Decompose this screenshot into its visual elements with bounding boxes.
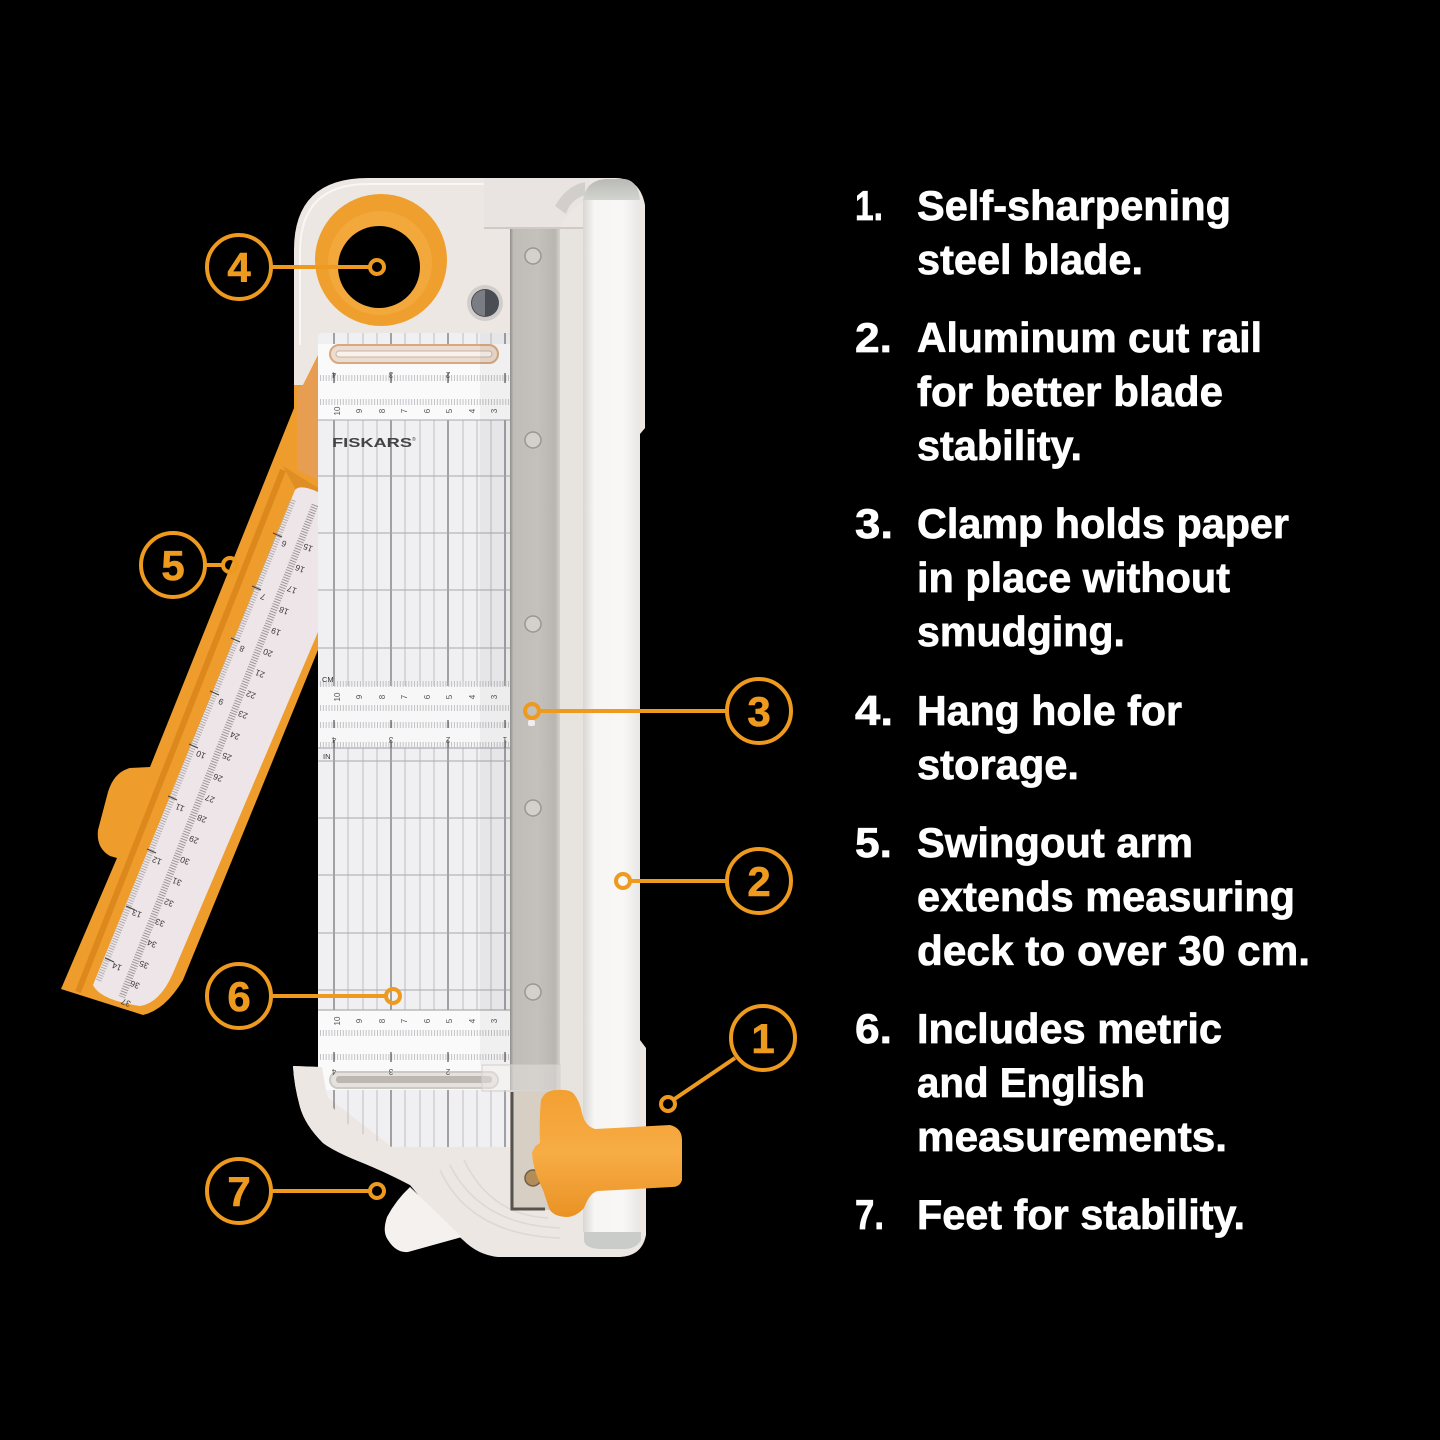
logo: FISKARS	[332, 436, 412, 450]
logo: ®	[412, 436, 416, 443]
cm numbers middle: 9	[355, 694, 364, 699]
cm numbers middle: 10	[333, 692, 342, 701]
arm cm labels: 33	[153, 916, 166, 929]
item 4: Hang hole for	[917, 687, 1182, 734]
top clamp bracket	[484, 178, 590, 228]
trimmer base	[293, 178, 646, 1257]
arm inch labels: 8	[238, 643, 246, 654]
cm numbers middle: 5	[445, 694, 454, 699]
arm cm labels: 37	[119, 996, 132, 1009]
cm numbers bottom: 7	[400, 1018, 409, 1023]
item 1	[855, 182, 1231, 283]
grid horizontal lines	[318, 420, 510, 990]
arm tick marks	[98, 500, 293, 982]
cm numbers top: 7	[400, 408, 409, 413]
clamp nub	[528, 720, 535, 726]
major ruler ticks	[334, 373, 505, 1062]
arm top shading	[283, 466, 318, 520]
arm ridge channel	[78, 470, 283, 992]
feature list	[855, 182, 1310, 1238]
cm numbers middle: 6	[423, 694, 432, 699]
callout 7: feet: 7	[227, 1168, 251, 1215]
arm body	[61, 345, 318, 1015]
cm numbers middle: 7	[400, 694, 409, 699]
cm numbers bottom: 4	[468, 1018, 477, 1023]
rail cap bottom	[584, 1232, 641, 1249]
hang hole	[338, 226, 420, 308]
item 5: extends measuring	[917, 873, 1295, 920]
cm numbers bottom: 6	[423, 1018, 432, 1023]
translucent clamp overlap on deck	[480, 333, 510, 1065]
screws	[525, 248, 541, 1000]
inch numbers bottom: 2	[445, 1067, 450, 1076]
inch numbers top: 3	[388, 370, 393, 379]
item 3: 3.	[855, 500, 893, 547]
clamp knob	[467, 285, 503, 321]
arm cm labels: 30	[178, 854, 191, 867]
cm numbers bottom: 8	[378, 1018, 387, 1023]
item 6: measurements.	[917, 1113, 1227, 1160]
cm numbers middle: 3	[490, 694, 499, 699]
orange hang ring	[315, 194, 447, 326]
arm cm labels: 21	[253, 667, 266, 680]
inch numbers middle: 3	[388, 735, 393, 744]
item 2: Aluminum cut rail	[917, 314, 1262, 361]
arm cm labels: 36	[128, 978, 141, 991]
top ruler band	[318, 344, 510, 420]
grid minor vertical lines	[348, 333, 491, 1147]
arm cm labels: 31	[170, 875, 183, 888]
callout 6: measurements: 6	[227, 973, 251, 1020]
item 3: smudging.	[917, 608, 1125, 655]
cm numbers middle	[333, 692, 499, 701]
grid major vertical lines	[334, 333, 505, 1147]
inch numbers top: 2	[445, 370, 450, 379]
arm inch labels: 10	[194, 748, 207, 761]
item 3: Clamp holds paper	[917, 500, 1289, 547]
arm inch labels: 14	[110, 960, 123, 973]
item 3: in place without	[917, 554, 1230, 601]
arm cm labels: 18	[277, 604, 290, 617]
arm cm labels: 15	[301, 541, 314, 554]
logo	[332, 436, 416, 450]
item 1: Self-sharpening	[917, 182, 1231, 229]
callout 3: clamp	[525, 679, 791, 743]
cm numbers bottom: 9	[355, 1018, 364, 1023]
arm major inch ticks	[105, 533, 282, 962]
arm inch labels: 7	[259, 591, 267, 602]
cm numbers middle: 8	[378, 694, 387, 699]
arm cm labels: 17	[285, 583, 298, 596]
cm numbers top: 6	[423, 408, 432, 413]
arm cm labels: 16	[293, 562, 306, 575]
light channel	[560, 228, 584, 1210]
peach translucent strip over arm	[297, 357, 318, 480]
IN label: IN	[323, 752, 330, 761]
callout 4: hang hole	[207, 235, 384, 299]
arm cm labels	[119, 541, 314, 1009]
callout 6: measurements	[207, 964, 400, 1028]
callout 1: blade: 1	[751, 1015, 775, 1062]
cm numbers top	[333, 406, 499, 415]
cm numbers top: 9	[355, 408, 364, 413]
arm inch labels: 9	[217, 696, 225, 707]
arm inch labels: 11	[174, 801, 186, 814]
top base highlight edge	[300, 184, 590, 345]
inch numbers bottom	[331, 1067, 450, 1076]
cm numbers bottom: 10	[333, 1016, 342, 1025]
blade handle	[532, 1090, 682, 1217]
item 1: 1.	[855, 182, 883, 229]
inch numbers middle: 2	[445, 735, 450, 744]
arm ruler face	[93, 487, 318, 1006]
item 3	[855, 500, 1289, 655]
inch numbers bottom: 3	[388, 1067, 393, 1076]
callout 3: clamp: 3	[747, 688, 771, 735]
item 7: 7.	[855, 1191, 884, 1238]
arm inch labels: 12	[150, 854, 163, 867]
bottom slot	[330, 1072, 498, 1088]
item 1: steel blade.	[917, 236, 1143, 283]
CM label: CM	[322, 675, 334, 684]
item 7: Feet for stability.	[917, 1191, 1245, 1238]
item 6: 6.	[855, 1005, 892, 1052]
callout 4: hang hole: 4	[227, 244, 251, 291]
arm inch labels	[110, 538, 288, 973]
cm numbers top: 3	[490, 408, 499, 413]
callout 5: swingout arm: 5	[161, 542, 185, 589]
deck surface	[318, 333, 510, 1147]
rail cap top	[583, 179, 640, 200]
item 5: Swingout arm	[917, 819, 1193, 866]
product illustration: paper trimmer	[61, 178, 682, 1257]
aluminum cut rail	[583, 179, 641, 1249]
cm numbers middle: 4	[468, 694, 477, 699]
inch numbers middle	[331, 735, 507, 744]
arm cm labels: 20	[261, 646, 274, 659]
clamp lower bracket	[482, 1065, 560, 1091]
arm cm labels: 22	[244, 688, 257, 701]
cm numbers bottom: 5	[445, 1018, 454, 1023]
arm cm labels: 32	[162, 896, 175, 909]
item 2: stability.	[917, 422, 1082, 469]
cm numbers top: 8	[378, 408, 387, 413]
item 5	[855, 819, 1310, 974]
blade plate outline	[512, 1092, 545, 1209]
item 6	[855, 1005, 1227, 1160]
item 6: and English	[917, 1059, 1145, 1106]
arm cm labels: 26	[211, 771, 224, 784]
arm cm labels: 28	[195, 812, 208, 825]
inch numbers top: 4	[331, 370, 336, 379]
inch numbers middle: 1	[502, 735, 507, 744]
inch numbers top	[331, 370, 450, 379]
cm numbers bottom: 3	[490, 1018, 499, 1023]
swingout arm	[61, 345, 318, 1015]
ruler ticks	[320, 378, 509, 1057]
top slot	[330, 345, 498, 363]
callout 2: rail: 2	[747, 858, 771, 905]
item 6: Includes metric	[917, 1005, 1222, 1052]
inch numbers middle: 4	[331, 735, 336, 744]
ring inner bevel	[328, 211, 432, 315]
item 4	[855, 687, 1182, 788]
arm cm labels: 34	[145, 937, 158, 950]
blade channel	[510, 1090, 560, 1210]
item 5: deck to over 30 cm.	[917, 927, 1310, 974]
callout 5: swingout arm	[141, 533, 237, 597]
blade screw	[525, 1170, 541, 1186]
arm inch labels: 13	[130, 907, 143, 920]
arm cm labels: 23	[236, 708, 249, 721]
callout 1: blade	[661, 1006, 795, 1111]
foot	[385, 1187, 462, 1252]
item 2: for better blade	[917, 368, 1223, 415]
arm inch labels: 6	[280, 538, 288, 549]
callout 7: feet	[207, 1159, 384, 1223]
item 2: 2.	[855, 314, 892, 361]
base bottom sweep lines	[440, 1160, 560, 1238]
item 4: 4.	[855, 687, 893, 734]
callout 2: rail	[616, 849, 791, 913]
arm cm labels: 35	[137, 958, 150, 971]
arm cm labels: 27	[203, 792, 216, 805]
arm cm labels: 19	[269, 625, 282, 638]
item 5: 5.	[855, 819, 892, 866]
middle ruler band	[318, 686, 510, 748]
measuring deck	[293, 333, 510, 1185]
bracket lower line	[484, 227, 583, 229]
cm numbers top: 10	[333, 406, 342, 415]
cm numbers top: 5	[445, 408, 454, 413]
bottom ruler band	[318, 1010, 510, 1090]
hinge	[555, 182, 585, 214]
cm numbers bottom	[333, 1016, 499, 1025]
grey clamp bar	[510, 228, 560, 1090]
bottom-left lip of base over deck	[293, 1066, 420, 1185]
arm cm labels: 24	[228, 729, 241, 742]
item 4: storage.	[917, 741, 1079, 788]
clamp	[482, 178, 590, 1210]
arm cm labels: 25	[220, 750, 233, 763]
item 2	[855, 314, 1262, 469]
cm numbers top: 4	[468, 408, 477, 413]
inch numbers bottom: 4	[331, 1067, 336, 1076]
ruler band edges	[318, 748, 510, 1010]
rail	[583, 200, 640, 1232]
arm cm labels: 29	[187, 833, 200, 846]
